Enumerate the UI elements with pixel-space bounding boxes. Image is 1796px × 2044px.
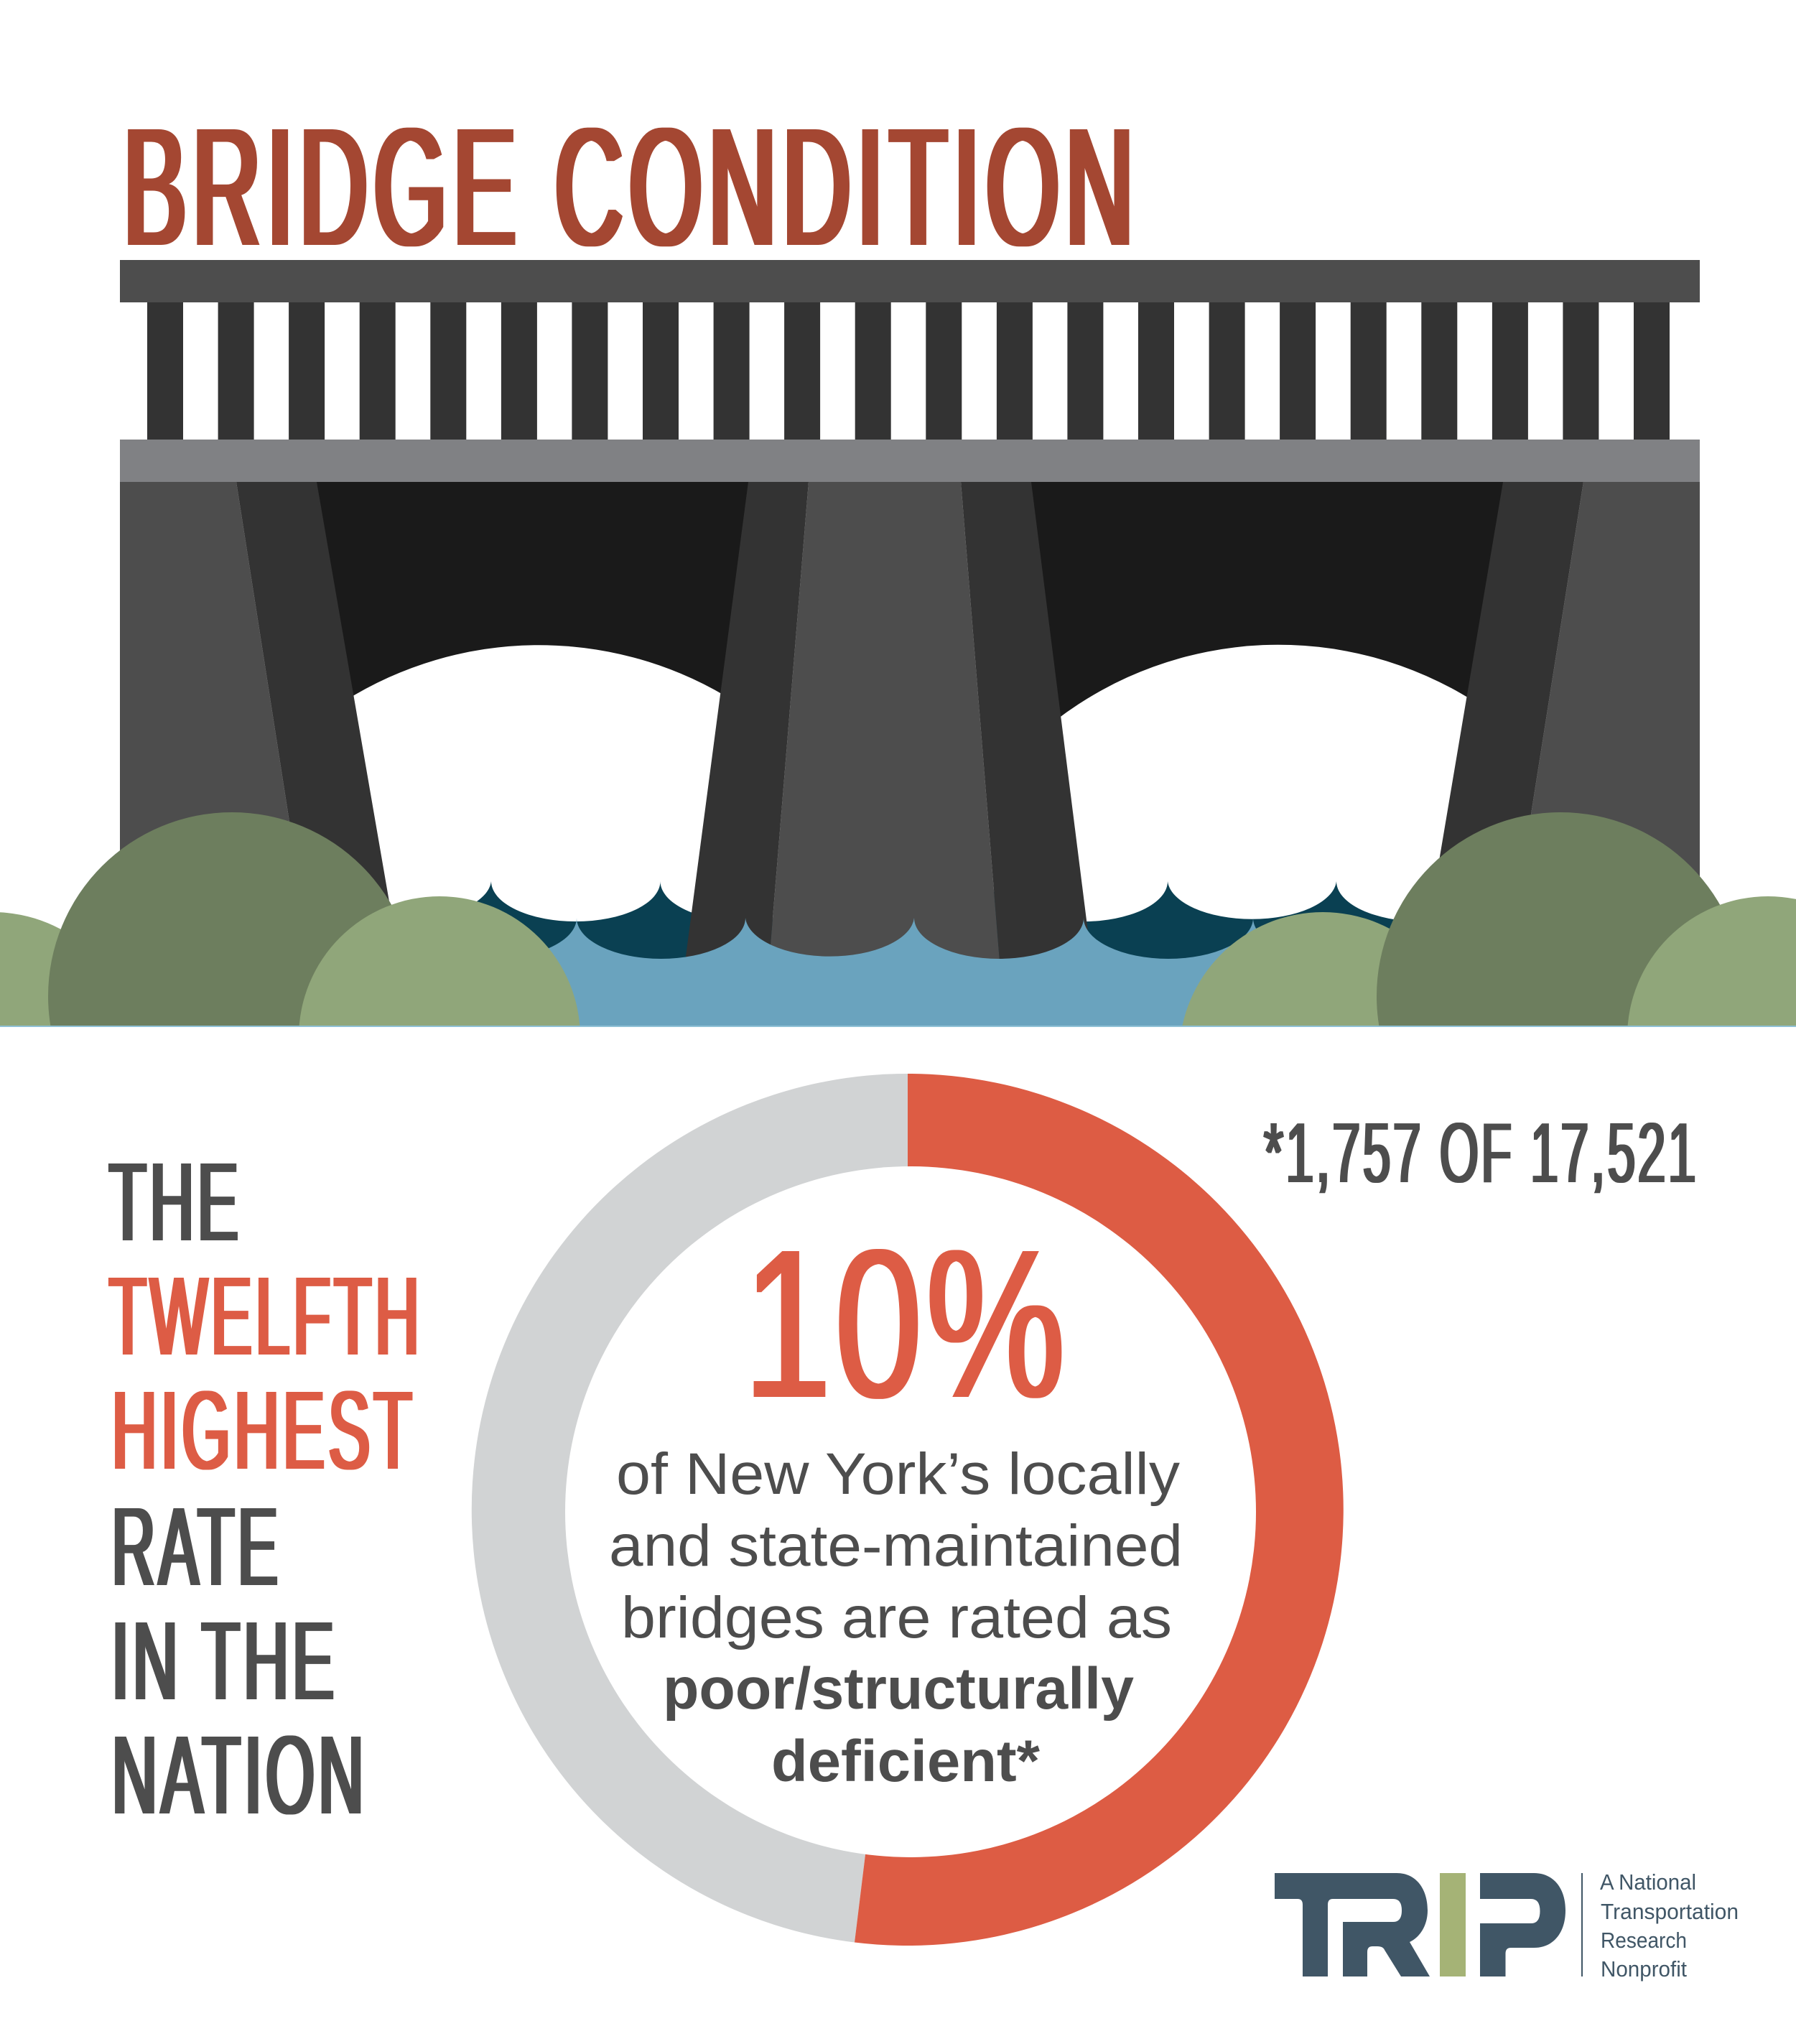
logo tagline: Transportation (1601, 1899, 1739, 1924)
ranking statement: NATION (112, 1712, 368, 1837)
left arch opening (345, 645, 725, 1027)
back water waves (322, 881, 1506, 1020)
donut description: bridges are rated as (621, 1585, 1172, 1650)
ranking statement: HIGHEST (112, 1367, 416, 1492)
shoreline (0, 1026, 1796, 1027)
left arch shadow (309, 482, 754, 705)
right pier (1415, 482, 1700, 1005)
bushes (0, 812, 1796, 1026)
donut description: of New York’s locally (616, 1441, 1180, 1507)
front water (407, 918, 1422, 1027)
logo tagline (1600, 1869, 1739, 1982)
ranking statement: RATE (112, 1484, 282, 1609)
logo divider (1581, 1873, 1583, 1976)
donut description: and state-maintained (609, 1513, 1183, 1579)
logo letter I (1440, 1873, 1466, 1976)
TRIP logo (1275, 1869, 1739, 1982)
donut description: deficient* (771, 1729, 1040, 1794)
logo tagline: A National (1600, 1869, 1696, 1895)
right arch shadow (1027, 482, 1508, 726)
logo tagline: Research (1601, 1928, 1687, 1953)
ranking statement: TWELFTH (109, 1253, 423, 1378)
donut chart (472, 1074, 1344, 1946)
logo tagline: Nonprofit (1601, 1956, 1687, 1982)
ranking statement: IN THE (112, 1598, 338, 1723)
logo letters T and R (1275, 1873, 1430, 1976)
top railing bar (120, 260, 1700, 302)
centre pier (679, 482, 1097, 1005)
ranking statement (109, 1139, 423, 1837)
bridge deck (120, 440, 1700, 482)
logo letter P (1480, 1873, 1565, 1976)
illustration: bridge over water (0, 260, 1796, 1027)
right arch opening (1056, 645, 1476, 1027)
ranking statement: THE (109, 1139, 242, 1264)
donut description (609, 1441, 1183, 1794)
donut description: poor/structurally (663, 1656, 1134, 1722)
balusters (147, 302, 1670, 440)
left pier (120, 482, 407, 1005)
percentage figure: 10% (744, 1205, 1069, 1442)
